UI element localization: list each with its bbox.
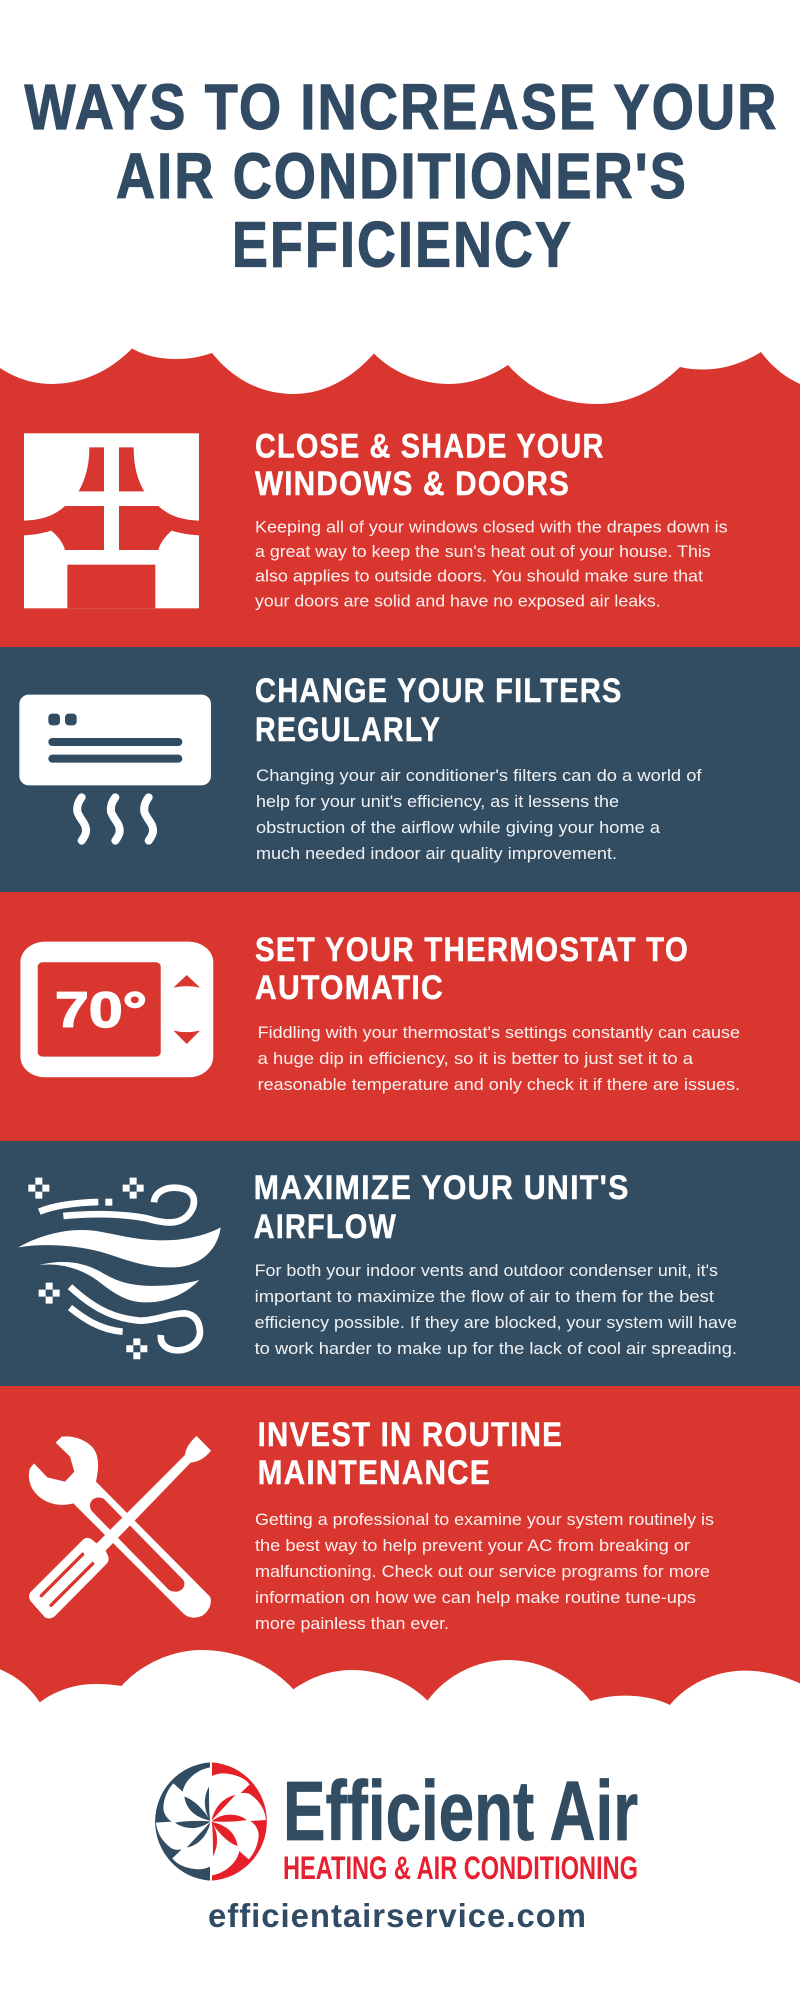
text block: change filters — [256, 767, 702, 863]
icon: logo fan — [155, 1762, 267, 1881]
text block: close and shade — [255, 518, 728, 610]
icon: thermostat — [20, 942, 213, 1077]
heading: close and shade: CLOSE & SHADE YOUR — [255, 428, 604, 466]
text block: close and shade: also applies to outside doors. You should make sure that — [255, 568, 703, 586]
text block: routine maintenance: Getting a professional to examine your system routinely is — [255, 1511, 714, 1529]
logo wordmark: Efficient Air — [283, 1764, 638, 1858]
text block: thermostat: reasonable temperature and only check it if there are issues. — [258, 1076, 740, 1094]
heading: routine maintenance — [258, 1416, 563, 1492]
panel: airflow — [0, 1141, 800, 1386]
heading: thermostat: AUTOMATIC — [255, 969, 444, 1007]
heading: airflow — [254, 1169, 630, 1246]
text block: routine maintenance: the best way to help prevent your AC from breaking or — [255, 1537, 691, 1555]
text block: routine maintenance — [255, 1511, 714, 1633]
icon: curtains on a window — [24, 433, 199, 608]
footer: white cloud edge — [0, 1650, 800, 2000]
heading: airflow: AIRFLOW — [254, 1208, 397, 1246]
title — [24, 71, 778, 280]
heading: change filters: REGULARLY — [255, 711, 441, 749]
text block: change filters: help for your unit's efficiency, as it lessens the — [256, 793, 619, 811]
logo: Efficient Air — [155, 1762, 638, 1886]
text block: thermostat: Fiddling with your thermostat's settings constantly can cause — [258, 1024, 740, 1042]
title: AIR CONDITIONER'S — [116, 140, 688, 212]
text block: close and shade: Keeping all of your windows closed with the drapes down is — [255, 518, 728, 536]
text block: thermostat: a huge dip in efficiency, so it is better to just set it to a — [258, 1050, 694, 1068]
heading: close and shade — [255, 428, 604, 503]
text block: thermostat — [258, 1024, 740, 1094]
text block: routine maintenance: malfunctioning. Check out our service programs for more — [255, 1563, 710, 1581]
panel: close and shade windows — [0, 348, 800, 647]
panel: routine maintenance — [0, 1386, 800, 1720]
heading: airflow: MAXIMIZE YOUR UNIT'S — [254, 1169, 630, 1207]
text block: airflow — [255, 1262, 737, 1358]
heading: thermostat — [255, 931, 689, 1007]
text block: close and shade: your doors are solid and have no exposed air leaks. — [255, 592, 661, 610]
icon: wall air conditioner — [19, 695, 211, 841]
title: EFFICIENCY — [232, 208, 573, 280]
panel: change filters — [0, 647, 800, 892]
text block: close and shade: a great way to keep the sun's heat out of your house. This — [255, 543, 711, 561]
logo tagline: HEATING & AIR CONDITIONING — [283, 1850, 638, 1886]
icon: wrench and screwdriver — [29, 1436, 211, 1618]
website url: efficientairservice.com — [208, 1897, 587, 1934]
heading: close and shade: WINDOWS & DOORS — [255, 465, 570, 503]
heading: routine maintenance: MAINTENANCE — [258, 1454, 491, 1492]
icon: wind — [18, 1178, 221, 1359]
text block: airflow: important to maximize the flow of air to them for the best — [255, 1288, 714, 1306]
text block: change filters: obstruction of the airflow while giving your home a — [256, 819, 661, 837]
text block: routine maintenance: information on how we can help make routine tune-ups — [255, 1589, 696, 1607]
heading: routine maintenance: INVEST IN ROUTINE — [258, 1416, 563, 1454]
text block: airflow: For both your indoor vents and outdoor condenser unit, it's — [255, 1262, 718, 1280]
heading: change filters: CHANGE YOUR FILTERS — [255, 672, 622, 710]
text block: airflow: efficiency possible. If they are blocked, your system will have — [255, 1314, 737, 1332]
text block: change filters: Changing your air conditioner's filters can do a world of — [256, 767, 702, 785]
text block: change filters: much needed indoor air quality improvement. — [256, 845, 617, 863]
heading: change filters — [255, 672, 622, 749]
panel: thermostat — [0, 892, 800, 1141]
text block: airflow: to work harder to make up for the lack of cool air spreading. — [255, 1340, 737, 1358]
heading: thermostat: SET YOUR THERMOSTAT TO — [255, 931, 689, 969]
text block: routine maintenance: more painless than ever. — [255, 1615, 449, 1633]
icon: thermostat: 70° — [55, 982, 147, 1038]
